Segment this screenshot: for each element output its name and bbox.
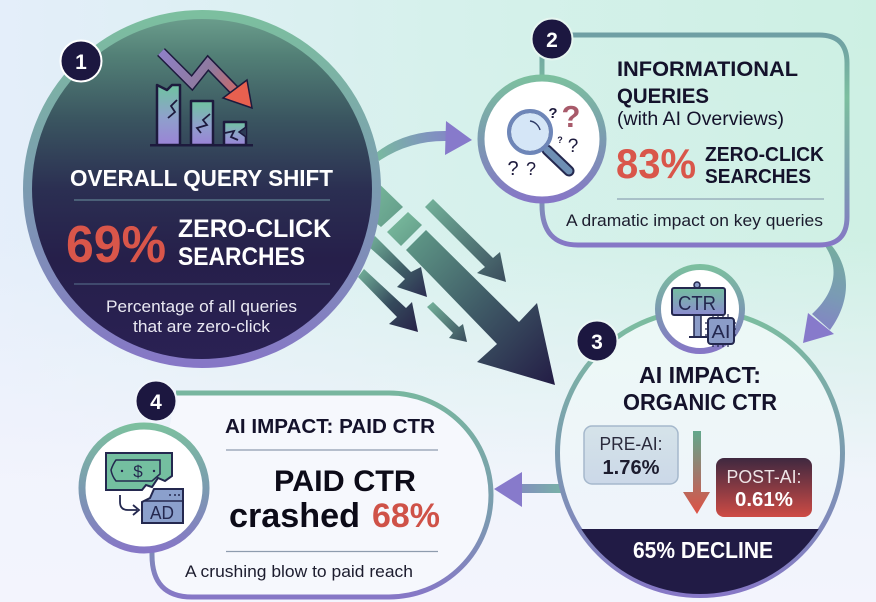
pre-AI value box: PRE-AI: [600, 434, 662, 454]
post-AI value box: POST-AI: [726, 467, 802, 487]
badge 1 [60, 40, 102, 82]
badge 4: 4 [150, 391, 162, 414]
heading: (with AI Overviews) [617, 109, 784, 130]
icon circle: magnifier with question marks: ? [557, 135, 563, 145]
heading: QUERIES [617, 84, 709, 108]
stat: 83% zero-click searches: ZERO-CLICK [705, 144, 825, 166]
icon circle: money to ad [82, 426, 206, 550]
heading: INFORMATIONAL [617, 57, 798, 81]
heading: AI IMPACT: PAID CTR [225, 416, 436, 438]
caption: A dramatic impact on key queries [566, 211, 823, 230]
decline band: 65% DECLINE [633, 537, 773, 563]
heading: ORGANIC CTR [623, 389, 777, 415]
icon circle: CTR sign with AI chip: AI [712, 322, 730, 342]
stat: 83% zero-click searches [616, 140, 825, 188]
stat: paid CTR crashed 68% [229, 465, 440, 535]
stat: paid CTR crashed 68%: crashed [229, 497, 360, 535]
caption: that are zero-click [133, 317, 270, 336]
caption: Percentage of all queries [106, 297, 297, 316]
stat: 83% zero-click searches: SEARCHES [705, 166, 811, 188]
icon: falling bar chart with down trend arrow [150, 52, 253, 146]
stat: paid CTR crashed 68%: PAID CTR [274, 465, 416, 498]
panel outline [152, 393, 491, 597]
caption [106, 297, 297, 336]
heading: OVERALL QUERY SHIFT [70, 165, 333, 191]
panel 2: informational queries [481, 35, 847, 245]
badge 2 [532, 18, 572, 60]
icon circle: magnifier with question marks: ? [562, 99, 580, 134]
stat: 83% zero-click searches: 83% [616, 140, 696, 187]
icon circle: money to ad: $ [133, 462, 143, 481]
heading [617, 57, 798, 130]
icon circle: CTR sign with AI chip: CTR [678, 293, 716, 315]
badge 4 [136, 380, 176, 422]
icon circle: magnifier with question marks: ? [526, 159, 536, 179]
badge 3: 3 [591, 331, 603, 354]
pre-AI value box: 1.76% [602, 457, 660, 479]
arrow: panel 2 to panel 3 [803, 246, 846, 343]
icon circle: magnifier with question marks: ? [507, 158, 519, 180]
pre-AI value box [584, 426, 678, 484]
badge 1: 1 [75, 51, 87, 74]
icon circle: money to ad: AD [150, 503, 174, 523]
heading: AI IMPACT: [639, 362, 761, 388]
down arrow [683, 431, 710, 514]
stat: 69% zero-click searches: 69% [66, 216, 166, 274]
post-AI value box: 0.61% [735, 489, 793, 511]
arrow: panel 1 to panel 2 [376, 121, 472, 161]
badge 3 [576, 320, 618, 362]
panel 1: overall query shift [28, 14, 376, 364]
icon circle: CTR sign with AI chip [658, 267, 742, 351]
arrow: panel 3 to panel 4 [494, 472, 562, 507]
post-AI value box [716, 458, 812, 517]
icon circle: magnifier with question marks: ? [568, 136, 578, 157]
decline band [581, 529, 819, 594]
caption: A crushing blow to paid reach [185, 562, 413, 581]
arrows: many dark arrows from panel 1 to panel 3 [358, 175, 555, 385]
stat: paid CTR crashed 68%: 68% [372, 497, 440, 535]
badge 2: 2 [546, 29, 558, 52]
heading [623, 362, 777, 415]
icon circle: magnifier with question marks: ? [548, 105, 558, 122]
panel outline [542, 35, 847, 245]
stat: 69% zero-click searches [66, 215, 331, 274]
panel 4: paid CTR [82, 393, 491, 597]
icon circle: magnifier with question marks [481, 78, 603, 200]
stat: 69% zero-click searches: SEARCHES [178, 243, 305, 271]
panel 3: organic CTR [555, 267, 845, 599]
stat: 69% zero-click searches: ZERO-CLICK [178, 215, 331, 243]
